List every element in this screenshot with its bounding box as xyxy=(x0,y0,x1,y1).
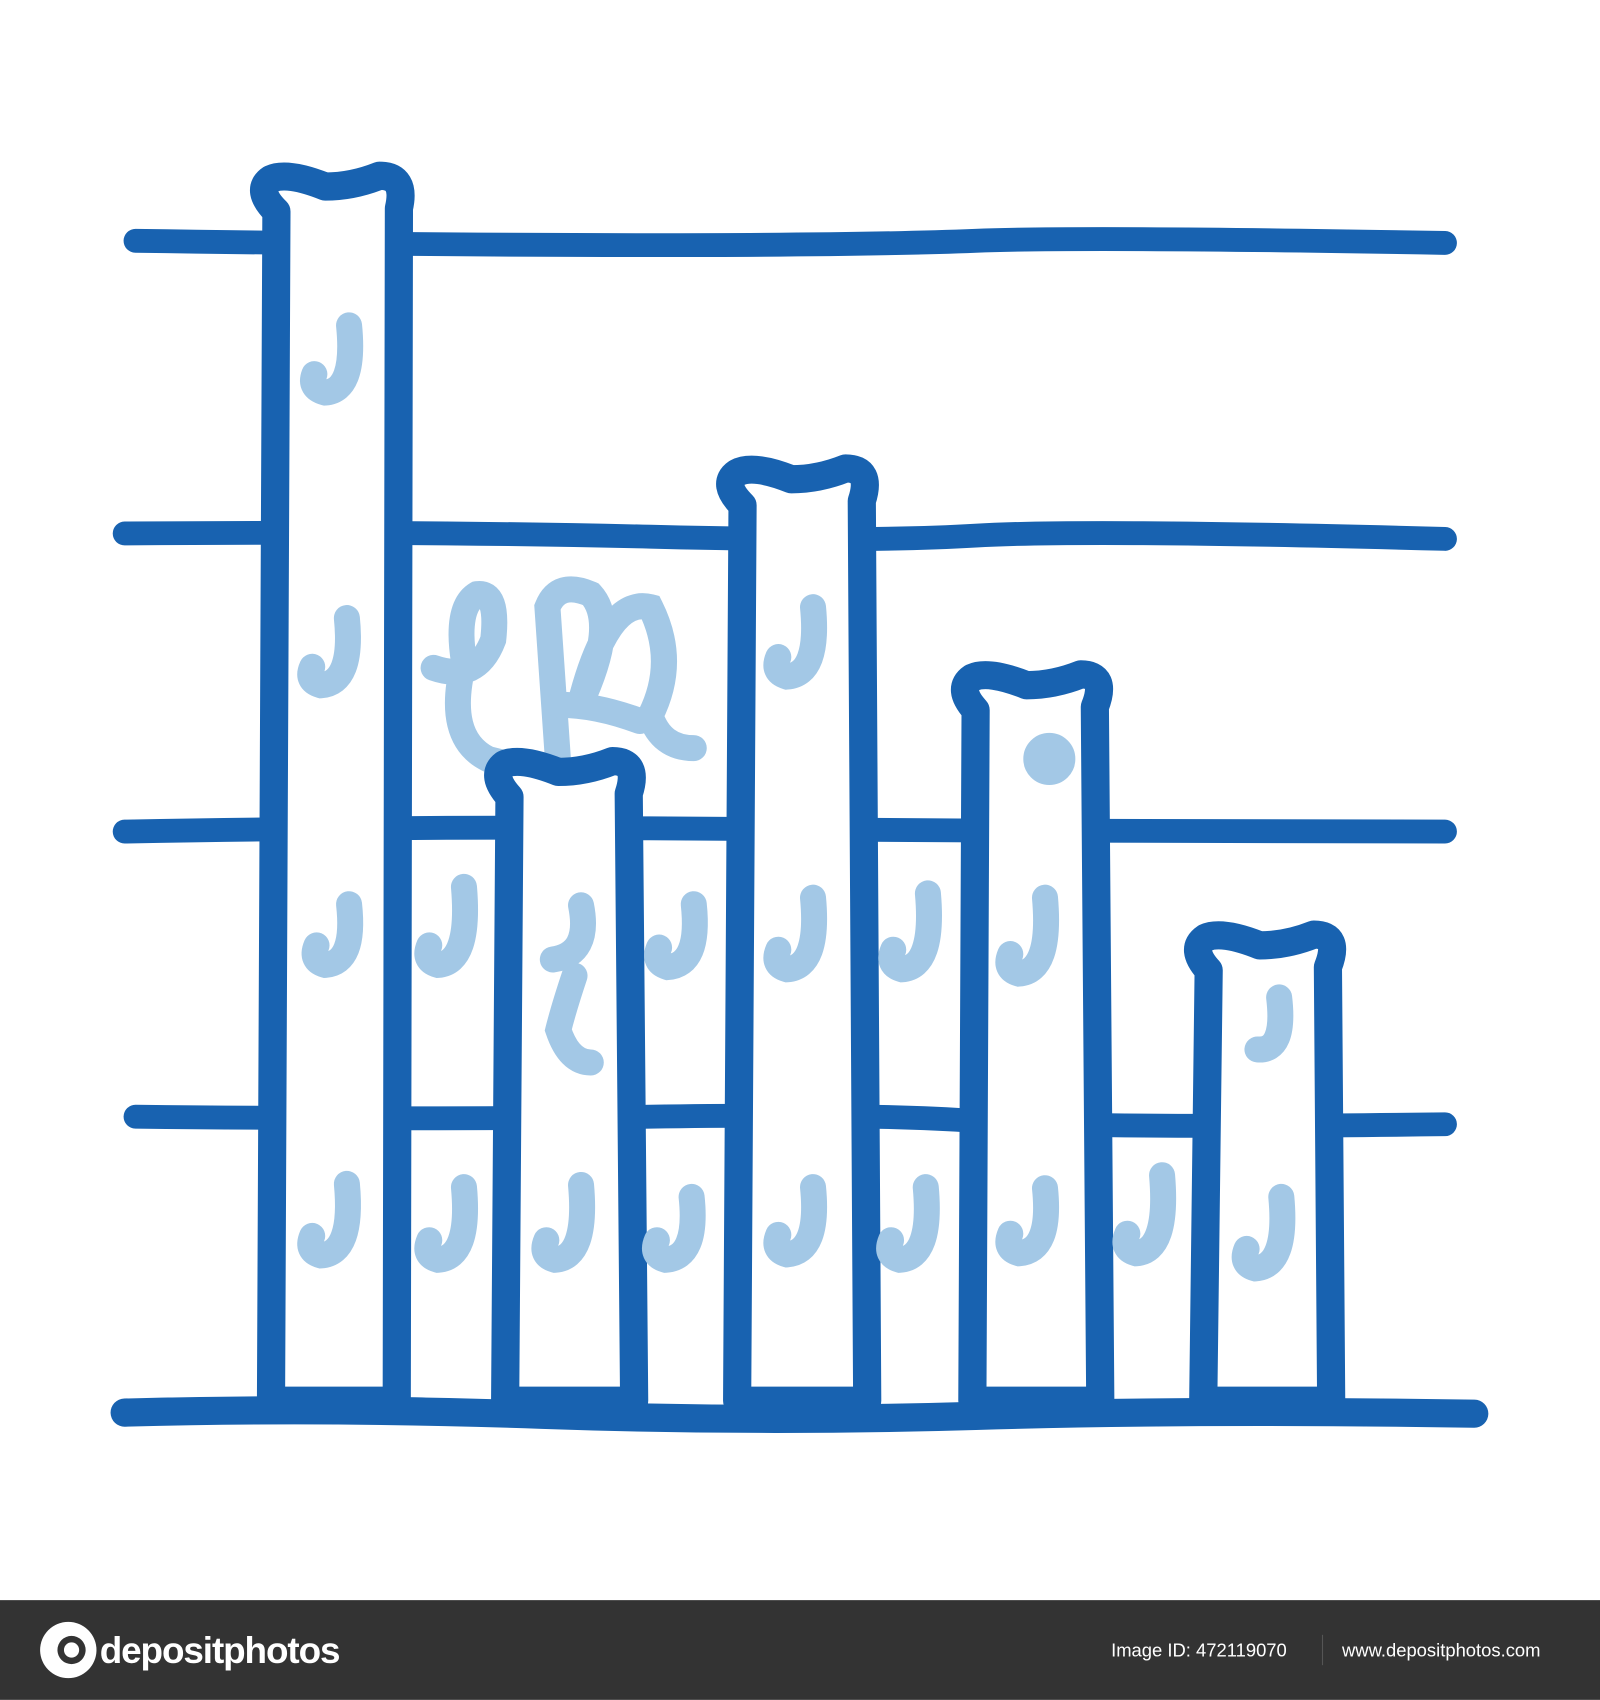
logo text: depositphotos xyxy=(100,1630,339,1671)
image id: Image ID: 472119070 xyxy=(1111,1640,1287,1661)
light blue scribble xyxy=(434,589,694,764)
grid lines xyxy=(125,239,1445,1126)
bars xyxy=(264,176,1332,1401)
website: www.depositphotos.com xyxy=(1341,1640,1540,1661)
baseline xyxy=(125,1410,1474,1419)
icon: camera logo xyxy=(40,1622,96,1678)
footer bar xyxy=(0,1600,1600,1700)
light blue J marks xyxy=(310,325,1282,1268)
